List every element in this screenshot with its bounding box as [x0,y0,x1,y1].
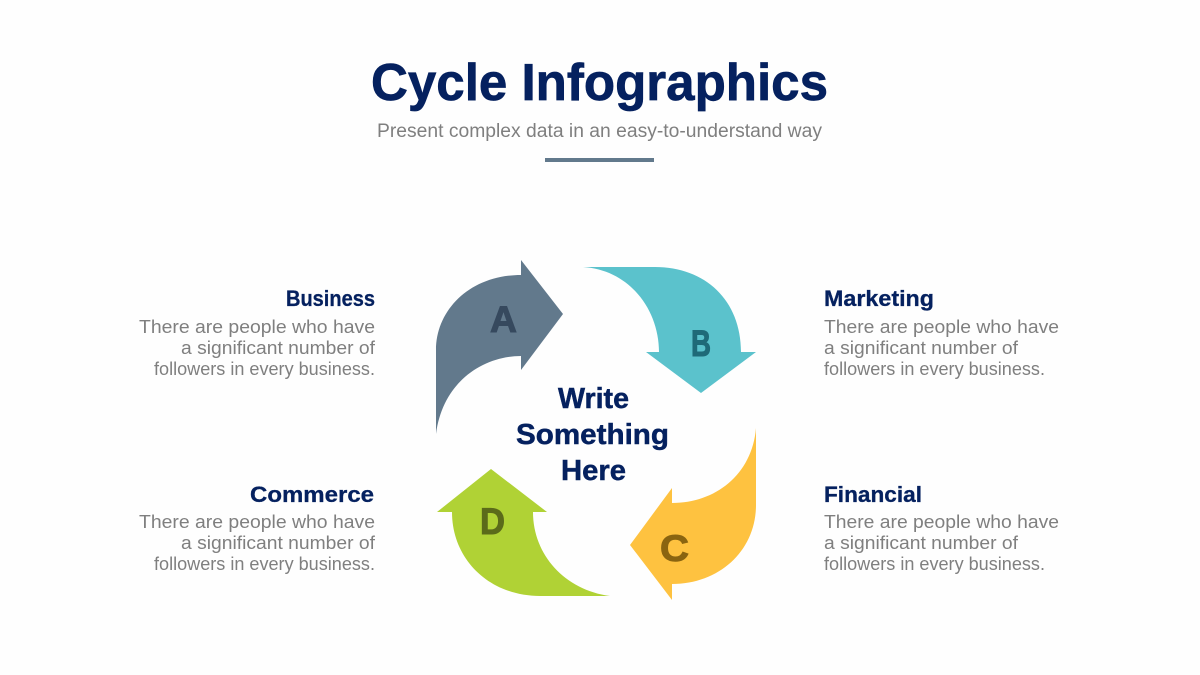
text block: Financial: Financial [824,482,922,507]
arrow A: A [490,299,517,340]
text block: Business: There are people who have [139,317,375,337]
text block: Financial: followers in every business. [824,554,1045,574]
text block: Business: Business [286,286,375,311]
text block: Financial: There are people who have [824,512,1059,532]
text block: Financial [824,482,1059,574]
arrow D [437,469,610,596]
arrow D: D [480,501,505,542]
arrow C: C [660,528,689,569]
text block: Marketing: followers in every business. [824,359,1045,379]
center text [516,383,669,487]
arrow B: B [691,323,711,364]
text block: Marketing: a significant number of [824,338,1019,358]
text block: Commerce: followers in every business. [154,554,375,574]
text block: Marketing [824,286,1059,379]
center text: Write [558,383,629,415]
text block: Commerce: Commerce [250,482,374,507]
title underline [545,158,654,162]
arrow A [436,260,563,434]
arrow B [583,267,756,393]
text block: Marketing: Marketing [824,286,934,311]
arrow C [630,428,756,600]
text block: Commerce [139,482,376,574]
text block: Commerce: a significant number of [181,533,376,553]
subtitle: Present complex data in an easy-to-understand way [377,121,822,142]
text block: Commerce: There are people who have [139,512,375,532]
text block: Business: followers in every business. [154,359,375,379]
text block: Marketing: There are people who have [824,317,1059,337]
title: Cycle Infographics [371,54,828,112]
text block: Business [139,286,376,379]
text block: Financial: a significant number of [824,533,1019,553]
center text: Something [516,419,669,451]
center text: Here [561,455,626,487]
text block: Business: a significant number of [181,338,376,358]
cycle diagram [436,260,756,600]
